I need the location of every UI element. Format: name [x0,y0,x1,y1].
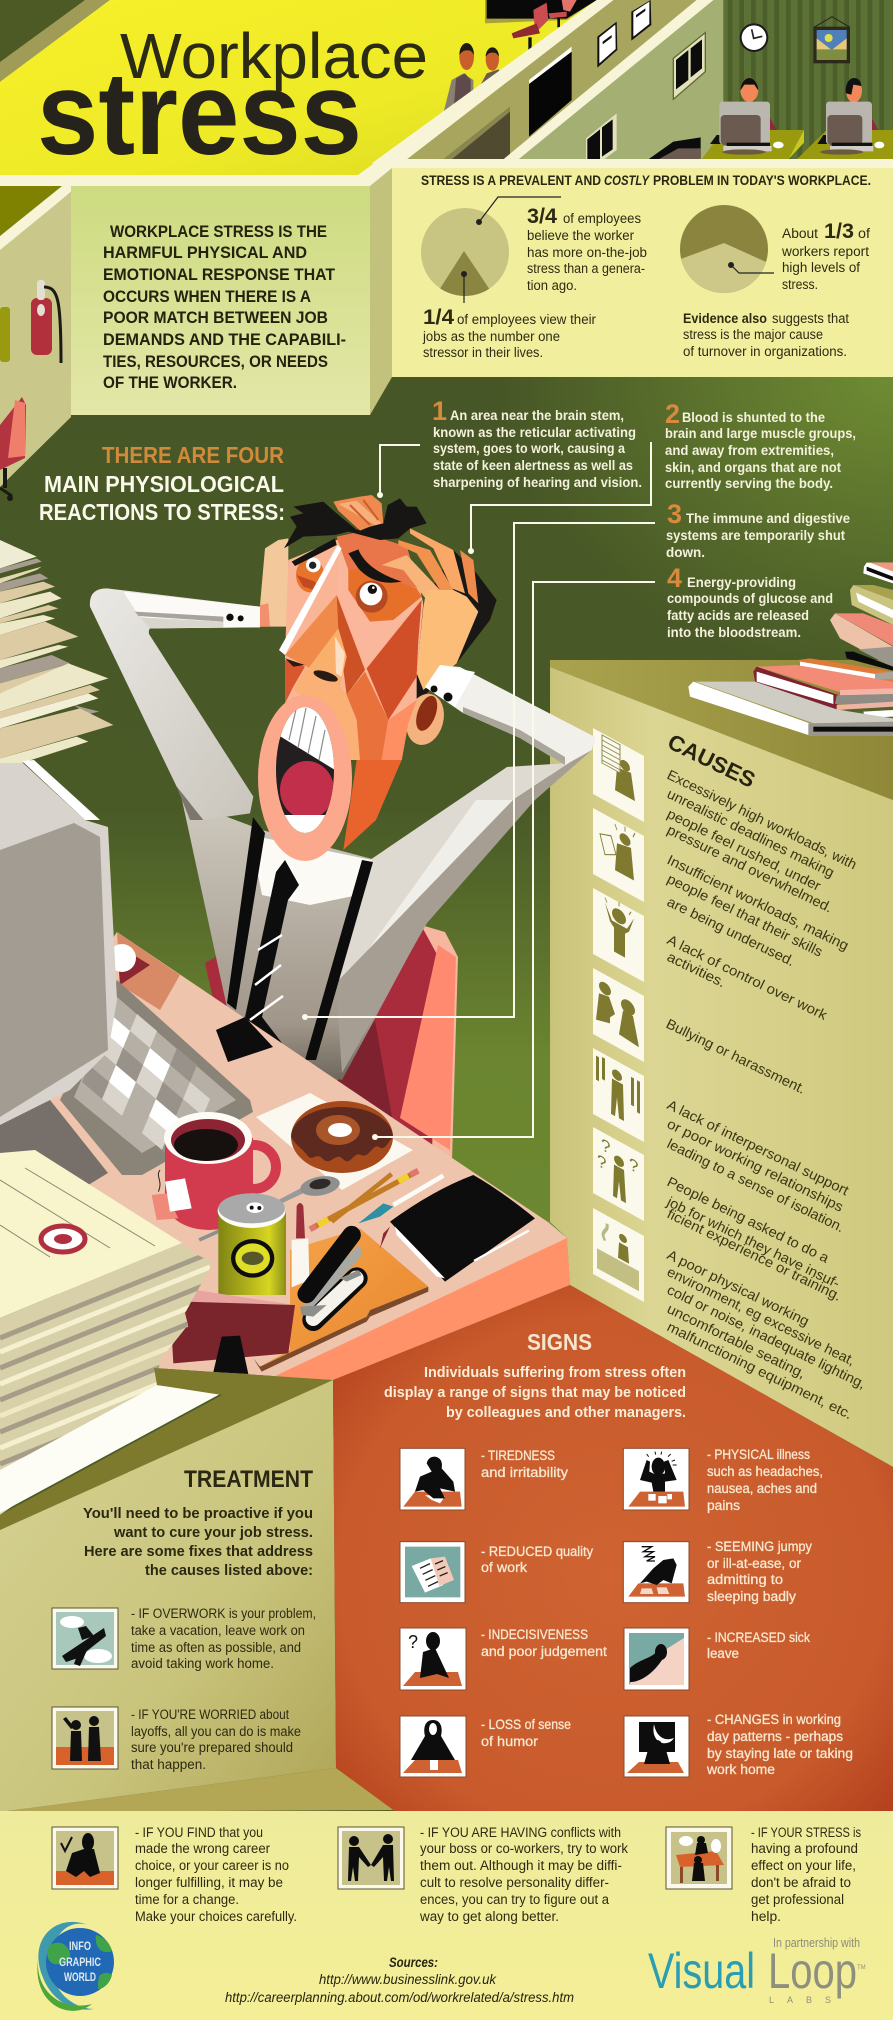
reaction 1: sharpening of hearing and vision. [433,475,642,490]
reaction 3: systems are temporarily shut [666,528,845,543]
footer text: conflicts: - IF YOU ARE HAVING conflicts with [420,1825,621,1840]
signs text: reduced [481,1544,593,1575]
signs text: changes: by staying late or taking [707,1746,853,1761]
causes text: cold or noise, inadequate lighting, [665,1281,869,1392]
cause icon 2 [593,808,644,902]
causes text: Bullying or harassment. [664,1015,808,1097]
shirt collar and suspenders [227,817,373,1060]
telephone desk [648,137,701,159]
cause icon 6: ? [629,1153,638,1178]
hand on crown [333,495,383,531]
framed notice one [597,22,617,68]
reaction 2: skin, and organs that are not [665,460,841,475]
right arm [336,737,595,1073]
signs text: seeming: or ill-at-ease, or [707,1556,801,1571]
treatment text: overwork [131,1606,316,1671]
footer text: career: made the wrong career [135,1841,270,1856]
wall picture [813,17,850,63]
donut on napkin [256,1093,413,1190]
lipstick [292,1203,309,1287]
icon: reduced quality [400,1542,465,1603]
upper paper stack [0,540,113,770]
footer text: conflicts: way to get along better. [419,1909,559,1924]
face planes [285,595,422,760]
reaction 1: state of keen alertness as well as [433,458,633,473]
sources: Sources: [389,1955,438,1970]
worker one [710,78,784,155]
icon: fire extinguisher [31,280,61,363]
hand on temple [382,528,478,690]
left arm [90,588,260,820]
window upper [673,33,705,99]
wall B [518,0,724,159]
pie chart: one third [680,205,774,293]
worker two [817,78,884,155]
sources [225,1955,574,2005]
top office scene [372,0,893,163]
footer text: career: - IF YOU FIND that you [135,1825,263,1840]
background colleagues [443,43,501,113]
one third text: of [858,226,870,241]
footer text: professional help: having a profound [751,1841,858,1856]
treatment text: overwork: avoid taking work home. [131,1656,274,1671]
reaction 1 [432,396,642,490]
stats heading: STRESS IS A PREVALENT AND [421,173,601,188]
sources: http://www.businesslink.gov.uk [319,1972,497,1987]
signs text: indecisive: and poor judgement [481,1644,607,1659]
signs text: humor [481,1717,571,1749]
causes text: People being asked to do a [665,1173,832,1266]
icon: counselling [666,1827,732,1889]
signs text: increased [707,1630,810,1661]
signs intro [384,1364,686,1421]
stats heading: COSTLY [604,173,651,188]
footer text: conflicts [419,1825,628,1924]
intro text: OF THE WORKER. [103,374,237,392]
intro text: DEMANDS AND THE CAPABILI- [103,331,346,349]
wall A [407,0,697,159]
reaction 4: 4 [667,563,682,593]
one quarter text: jobs as the number one [422,329,560,344]
causes text: A lack of control over work [665,931,831,1023]
icon: airplane [52,1608,118,1669]
panel: intro definition [71,168,392,415]
desk front edge [273,1238,570,1380]
icon: working late [624,1716,689,1777]
causes text [664,766,869,1422]
logo: info graphic world [37,1922,114,2011]
evidence text: of turnover in organizations. [683,344,847,359]
signs text: changes: - CHANGES in working [707,1712,841,1727]
book: white under stack [840,707,893,718]
one third text [781,220,870,292]
intro text: WORKPLACE STRESS IS THE [110,223,327,241]
causes text: job for which they have insuf- [664,1193,843,1291]
logo: visual loop labs: LABS [769,1995,831,2005]
causes text: Excessively high workloads, with [665,766,860,872]
signs text: indecisive: - INDECISIVENESS [481,1627,588,1642]
connector line 2 [468,442,651,554]
treatment text: layoffs: layoffs, all you can do is make [131,1724,301,1739]
seal [41,1226,85,1252]
header band [0,0,893,186]
panel: signs [333,1285,893,1812]
footer text: conflicts: ences, you can try to figure out a [420,1892,609,1907]
evidence text: Evidence also [683,311,767,326]
signs text: indecisive [481,1627,607,1659]
tin can [218,1193,286,1295]
book: olive [850,585,893,625]
causes text: unrealistic deadlines making [665,785,837,880]
cause icon 6: ? [597,1149,606,1174]
signs text: seeming [707,1539,812,1604]
footer text: career: longer fulfilling, it may be [135,1875,283,1890]
causes text: malfunctioning equipment, etc. [665,1318,855,1422]
treatment heading: TREATMENT [184,1466,313,1493]
cause icon 5 [593,1048,644,1142]
computer monitor [0,760,117,1190]
right eye socket [348,568,422,622]
book: black [845,647,893,671]
treatment text: overwork: - IF OVERWORK is your problem, [131,1606,316,1621]
tie end [216,1017,273,1062]
causes text: uncomfortable seating, [665,1300,808,1381]
signs text: increased: leave [707,1646,739,1661]
shirt cuff and forearm [425,665,595,765]
book: big salmon [830,613,893,667]
treatment text: overwork: take a vacation, leave work on [131,1623,305,1638]
three quarters text [527,205,647,293]
three quarters text: stress than a genera- [527,261,645,276]
causes text: Insufficient workloads, making [665,851,851,953]
heading: four reactions: REACTIONS TO STRESS: [39,499,285,525]
connector line 1 [377,445,420,498]
causes text: ficient experience or training. [665,1205,844,1304]
causes text: are being underused. [665,893,798,969]
intro text: POOR MATCH BETWEEN JOB [103,309,328,327]
icon: manager pointing [52,1707,118,1769]
orange folder [253,1228,428,1372]
connector line 3 [302,523,655,1020]
keyboard [60,980,253,1184]
mouth [258,695,352,861]
footer text: career: Make your choices carefully. [135,1909,297,1924]
footer text: conflicts: cult to resolve personality differ- [420,1875,609,1890]
three quarters text: tion ago. [527,278,577,293]
signs text: humor: - LOSS of sense [481,1717,571,1732]
office wall [702,0,893,159]
signs text: physical [707,1447,823,1513]
stapler [300,1235,362,1320]
icon: red office chair [0,397,26,501]
tea bag tag [152,1170,192,1220]
treatment intro [83,1506,313,1579]
cause icon 4 [593,968,644,1062]
panel: statistics [392,168,893,377]
causes text: people feel that their skills [665,870,825,960]
background desk and chairs [485,0,597,50]
signs text: reduced: of work [481,1560,527,1575]
reaction 3: 3 [667,499,682,529]
causes text: A poor physical working [665,1246,812,1329]
cause icon 7 [593,1208,644,1302]
corner stripes [0,0,110,82]
footer text: professional help: effect on your life, [751,1858,856,1873]
logo: visual loop labs: Loop [768,1943,857,1999]
icon: loss of humor [400,1716,466,1777]
signs text: increased: - INCREASED sick [707,1630,810,1645]
reaction 2: 2 [665,399,680,429]
reaction 1: system, goes to work, causing a [433,441,625,456]
signs text: tiredness: - TIREDNESS [481,1448,555,1463]
pen [358,1176,443,1223]
pencils [310,1171,418,1229]
photo frame [172,1290,295,1374]
treatment intro: You'll need to be proactive if you [83,1506,313,1522]
footer text: career: time for a change. [135,1892,239,1907]
reaction 2 [665,399,856,491]
suit torso [182,800,425,1080]
icon: indecisiveness [400,1628,466,1690]
panel: causes wall [550,563,893,1467]
cause icon 3 [593,888,644,982]
logo: visual loop labs: Visual [648,1943,755,1999]
eyebrows [292,538,402,583]
sources: http://careerplanning.about.com/od/workrelated/a/stress.htm [225,1990,574,2005]
signs text: tiredness [481,1448,568,1480]
signs text: humor: of humor [481,1734,539,1749]
treatment text: layoffs: sure you're prepared should [131,1740,293,1755]
causes text: pressure and overwhelmed. [665,821,835,915]
intro text [103,223,346,392]
one third text: workers report [781,244,869,259]
title: stress [37,48,362,180]
red chair [205,920,458,1160]
footer text: career [135,1825,297,1924]
signs text: physical: - PHYSICAL illness [707,1447,810,1462]
spoon [198,1173,341,1242]
logo: info graphic world: INFO [69,1939,91,1953]
footer text: professional help: don't be afraid to [751,1875,851,1890]
causes text: or poor working relationships [665,1115,846,1215]
tie [245,860,299,1047]
treatment text: layoffs: - IF YOU'RE WORRIED about [131,1707,289,1722]
logo: visual loop labs [648,1935,866,2005]
signs text: changes: work home [706,1762,775,1777]
reaction 4 [667,563,833,640]
eyes [306,558,388,613]
three quarters text: 3/4 [527,205,557,228]
nostrils [285,658,339,684]
green background [0,370,893,1250]
logo: info graphic world: WORLD [64,1970,96,1984]
heading: four reactions [39,442,285,525]
logo: visual loop labs: In partnership with [773,1935,860,1950]
icon: stack of books [688,563,893,736]
footer text: conflicts: them out. Although it may be diffi- [420,1858,622,1873]
one third text: high levels of [782,260,860,275]
causes text: environment, eg excessive heat, [665,1263,858,1368]
black notebook [380,1175,535,1282]
treatment intro: want to cure your job stress. [113,1525,313,1541]
stats heading [421,173,871,188]
book: red [753,665,893,710]
evidence text [683,311,849,359]
one quarter text: of employees view their [457,312,596,327]
book: orange [798,658,893,682]
treatment intro: the causes listed above: [145,1563,313,1579]
icon: tiredness [400,1448,465,1510]
one third text: 1/3 [824,220,854,243]
signs text: changes [706,1712,853,1777]
footer text: career: choice, or your career is no [135,1858,289,1873]
signs intro: display a range of signs that may be noticed [384,1384,686,1401]
cuff buttons [430,686,452,702]
head [260,495,497,850]
one third text: About [782,226,818,241]
icon: indecisiveness: ? [408,1632,418,1652]
icon: sick leave [624,1628,689,1690]
signs text: changes: day patterns - perhaps [707,1729,843,1744]
signs text: reduced: - REDUCED quality [481,1544,593,1559]
one quarter text [422,306,596,360]
icon: olive wall panel [0,307,10,362]
signs heading: SIGNS [527,1329,592,1355]
signs text: seeming: sleeping badly [707,1589,796,1604]
back hair [403,550,497,702]
signs text: seeming: admitting to [707,1572,783,1587]
three quarters text: of employees [563,211,641,226]
diagonal dividers [372,0,713,163]
logo: visual loop labs: TM [857,1965,866,1971]
reaction 1: known as the reticular activating [433,425,636,440]
title: Workplace [120,20,428,92]
panel: footer treatments [0,1811,893,2020]
cause icon 1 [593,728,644,822]
signs text: physical: such as headaches, [707,1464,823,1479]
reaction 2: Blood is shunted to the [682,410,825,425]
book: top white [863,563,893,583]
one quarter text: stressor in their lives. [423,345,543,360]
intro text: EMOTIONAL RESPONSE THAT [103,266,335,284]
footer text: professional help: - IF YOUR STRESS is [751,1825,861,1840]
reaction 2: and away from extremities, [665,443,834,458]
intro text: OCCURS WHEN THERE IS A [103,288,311,306]
treatment text: layoffs: that happen. [131,1757,206,1772]
jaw [343,760,402,850]
signs text: physical: pains [707,1498,740,1513]
signs text: physical: nausea, aches and [707,1481,817,1496]
signs text: tiredness: and irritability [481,1465,568,1480]
nose stripe [279,545,342,655]
shirt cuff buttons [226,614,244,621]
desk [0,932,570,1380]
signs intro: Individuals suffering from stress often [424,1364,686,1381]
intro text: HARMFUL PHYSICAL AND [103,244,307,262]
framed notice two [631,0,651,41]
logo: info graphic world: GRAPHIC [59,1955,101,1969]
signs intro: by colleagues and other managers. [446,1404,686,1421]
reaction 4: compounds of glucose and [667,591,833,606]
causes text: leading to a sense of isolation. [665,1135,847,1235]
three quarters text: has more on-the-job [527,245,647,260]
treatment text: overwork: time as often as possible, and [131,1640,301,1655]
footer text: professional help: help. [751,1909,781,1924]
evidence text: suggests that [772,311,849,326]
cause icon 6: ? [601,1134,610,1158]
causes text: A lack of interpersonal support [665,1096,852,1198]
icon: right choice [52,1827,118,1889]
desks [702,130,893,159]
reaction 4: fatty acids are released [667,608,809,623]
reaction 3: down. [666,545,705,560]
reaction 4: Energy-providing [687,575,796,590]
reaction 2: brain and large muscle groups, [665,426,856,441]
three quarters text: believe the worker [527,228,634,243]
window lower [586,113,617,159]
causes text: activities. [665,948,728,990]
cause icon 6 [593,1127,644,1221]
pie chart: three quarters [421,196,561,303]
coffee mug [164,1112,276,1230]
evidence text: stress is the major cause [683,327,823,342]
causes text: people feel rushed, under [665,805,824,894]
reaction 3 [666,499,850,560]
reaction 1: An area near the brain stem, [450,408,624,423]
wall clock [740,23,768,52]
door [529,47,572,137]
reaction 2: currently serving the body. [665,476,833,491]
one third text: stress. [782,277,818,292]
treatment intro: Here are some fixes that address [84,1544,313,1560]
footer text: professional help [751,1825,861,1924]
ear [401,689,449,749]
one quarter text: 1/4 [423,306,454,329]
icon: physical illness [623,1448,689,1510]
treatment text: layoffs [131,1707,301,1772]
lower paper stack [0,1150,222,1515]
reaction 3: The immune and digestive [686,511,850,526]
reaction 1: 1 [432,396,447,426]
stressed man illustration [90,495,595,1160]
hair [284,498,427,548]
icon: handshake [338,1827,404,1889]
intro text: TIES, RESOURCES, OR NEEDS [103,353,328,371]
connector line 4 [372,582,655,1140]
left eye socket [296,558,324,592]
stats heading: PROBLEM IN TODAY'S WORKPLACE. [653,173,871,188]
footer text: professional help: get professional [751,1892,844,1907]
icon: jumpy [623,1542,689,1603]
desk objects [152,1170,535,1374]
book: bottom grey [688,682,893,736]
causes heading: CAUSES [664,729,759,793]
face skin [285,533,423,760]
left hand [260,538,288,627]
panel: treatment [0,1368,396,1812]
left wall with extinguisher [0,186,78,501]
heading: four reactions: MAIN PHYSIOLOGICAL [44,471,284,497]
heading: four reactions: THERE ARE FOUR [102,442,284,468]
yellow title field [0,0,597,175]
signs text: seeming: - SEEMING jumpy [707,1539,812,1554]
footer text: conflicts: your boss or co-workers, try to work [420,1841,628,1856]
forehead [337,532,418,588]
reaction 4: into the bloodstream. [667,625,801,640]
